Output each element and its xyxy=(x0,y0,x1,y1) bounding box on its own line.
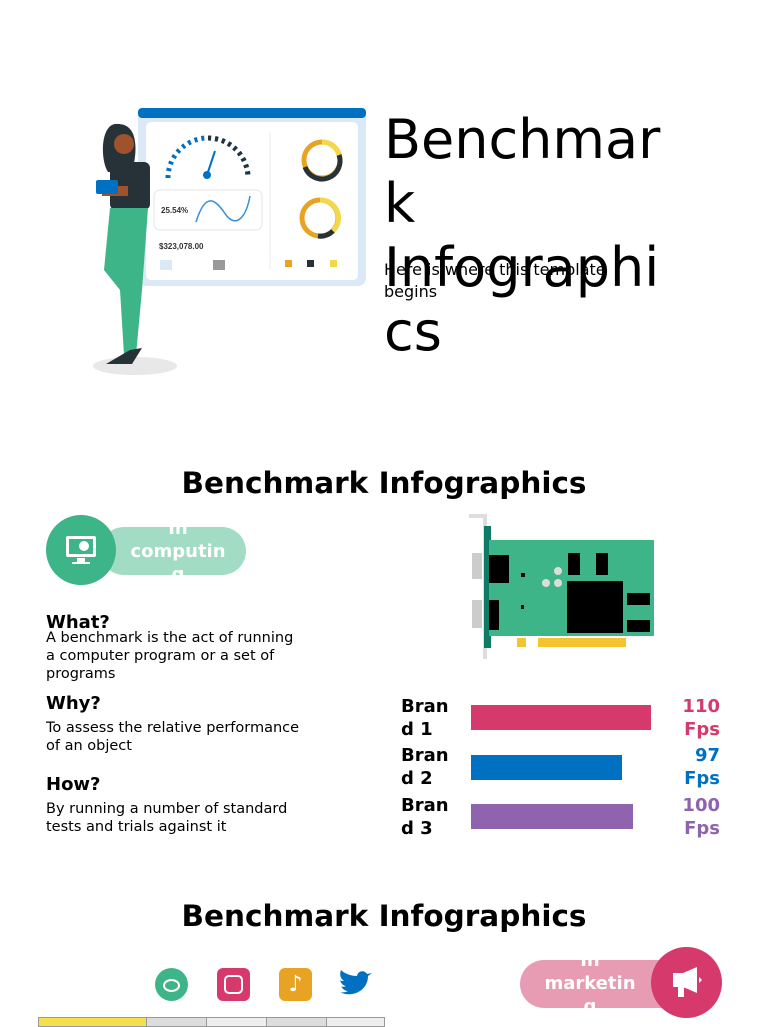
bar chart: d 2 xyxy=(401,768,433,789)
text: To assess the relative performance xyxy=(46,720,299,736)
title: cs xyxy=(384,300,442,363)
pill: in computing: computin xyxy=(130,541,226,562)
bar chart: Fps xyxy=(684,818,720,839)
table header xyxy=(38,1017,385,1027)
icon: megaphone xyxy=(651,947,722,1018)
section heading 2: Benchmark Infographics xyxy=(182,899,586,933)
bar chart xyxy=(401,696,720,839)
section heading 1: Benchmark Infographics xyxy=(182,466,586,500)
icon: graphics card xyxy=(469,514,654,659)
bar chart: d 1 xyxy=(401,719,433,740)
how: How? xyxy=(46,774,101,795)
icon: monitor xyxy=(46,515,116,585)
bar chart: 97 xyxy=(695,745,720,766)
title: Infographi xyxy=(384,236,659,299)
pill: in computing: g xyxy=(172,564,184,585)
bar chart: Bran xyxy=(401,696,449,717)
pill: in computing: In xyxy=(168,518,188,539)
text: By running a number of standard xyxy=(46,801,287,817)
bar chart: Fps xyxy=(684,768,720,789)
bar chart: d 3 xyxy=(401,818,433,839)
hero illustration: dashboard with woman: $323,078.00 xyxy=(159,242,204,251)
title: Benchmar xyxy=(384,108,660,171)
text: programs xyxy=(46,666,115,682)
social icons xyxy=(155,968,372,1001)
title: k xyxy=(384,172,415,235)
bar chart: 100 xyxy=(682,795,720,816)
text: A benchmark is the act of running xyxy=(46,630,293,646)
social icons: ♪ xyxy=(288,972,303,997)
pill: in marketing: In xyxy=(580,950,600,971)
pill: in marketing xyxy=(520,947,722,1018)
why: Why? xyxy=(46,693,101,714)
text: of an object xyxy=(46,738,132,754)
pill: in marketing: g xyxy=(584,996,596,1017)
text: a computer program or a set of xyxy=(46,648,274,664)
text: tests and trials against it xyxy=(46,819,226,835)
bar chart: 110 xyxy=(682,696,720,717)
title xyxy=(384,108,660,363)
bar chart: Bran xyxy=(401,745,449,766)
pill: in computing xyxy=(46,515,246,585)
bar chart: Fps xyxy=(684,719,720,740)
hero illustration: dashboard with woman: 25.54% xyxy=(161,206,188,215)
bar chart: Bran xyxy=(401,795,449,816)
pill: in marketing: marketin xyxy=(544,973,636,994)
subtitle: Here is where this template begins xyxy=(384,260,606,301)
what: What? xyxy=(46,612,110,633)
hero illustration: dashboard with woman xyxy=(93,108,366,375)
